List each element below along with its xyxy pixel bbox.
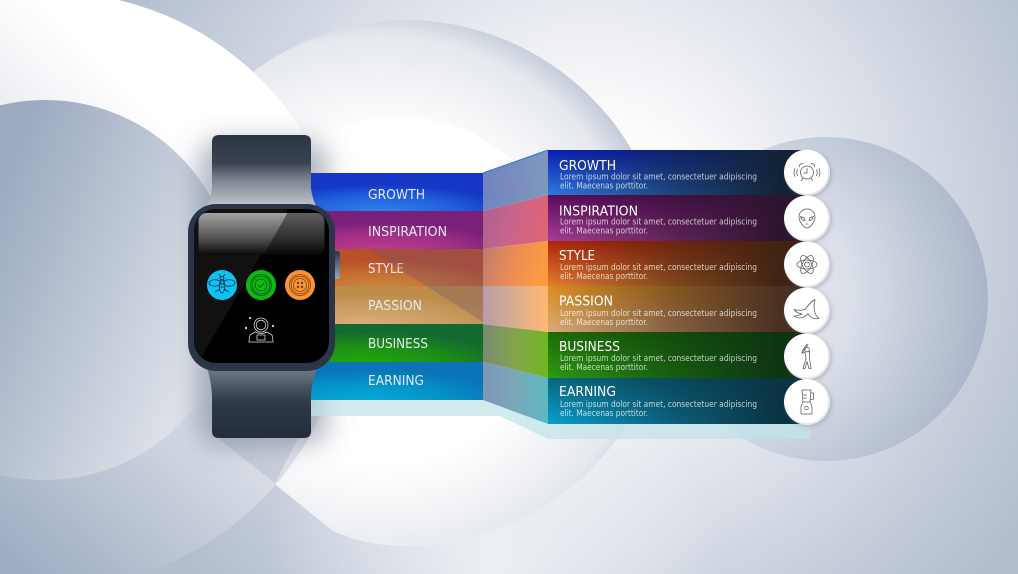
panel: left label bands [311, 173, 483, 400]
row: business: BUSINESS [559, 340, 620, 355]
watch [188, 135, 340, 438]
band: business: BUSINESS [368, 337, 428, 352]
band: business [311, 324, 483, 362]
row: passion: PASSION [559, 294, 613, 310]
app icon: check badge [246, 270, 276, 300]
screen glare [198, 213, 324, 255]
row: earning: EARNING [559, 385, 616, 400]
row: business: Lorem ipsum dolor sit amet, consectetuer adipiscing [560, 354, 757, 364]
app icon: button [285, 270, 315, 300]
band reflection under panels [311, 400, 810, 439]
row: style: STYLE [559, 249, 595, 264]
row: inspiration: INSPIRATION [559, 204, 638, 220]
row: passion: elit. Maecenas porttitor. [560, 318, 648, 328]
band: earning: EARNING [368, 374, 424, 389]
row: earning: Lorem ipsum dolor sit amet, consectetuer adipiscing [560, 400, 757, 410]
band: passion [311, 286, 483, 324]
row: earning: elit. Maecenas porttitor. [560, 409, 648, 419]
panel: angled connector [483, 150, 548, 424]
row: business [548, 332, 806, 378]
band: style: STYLE [368, 262, 404, 277]
row: growth: elit. Maecenas porttitor. [560, 182, 648, 192]
band: style [311, 249, 483, 286]
row: inspiration: Lorem ipsum dolor sit amet, consectetuer adipiscing [560, 218, 757, 228]
watch screen [194, 205, 329, 370]
icon: banana [784, 288, 830, 334]
watch strap bottom [207, 368, 317, 438]
watch strap top [206, 135, 317, 208]
icon: astronaut [245, 317, 274, 342]
app icon: bee [207, 270, 237, 300]
panel: right description rows [548, 150, 806, 424]
diagonal tint across bands [368, 249, 483, 324]
icon: alien [784, 196, 830, 242]
row: inspiration: elit. Maecenas porttitor. [560, 226, 648, 236]
band: inspiration: INSPIRATION [368, 225, 447, 240]
watch soft shadow [198, 140, 328, 445]
row: growth: Lorem ipsum dolor sit amet, consectetuer adipiscing [560, 172, 757, 182]
row: inspiration [548, 195, 806, 241]
icon: atom [784, 242, 830, 288]
icon: blender [784, 379, 830, 425]
watch crown [333, 251, 340, 279]
row: passion: Lorem ipsum dolor sit amet, consectetuer adipiscing [560, 309, 757, 319]
band: growth: GROWTH [368, 188, 425, 203]
band: inspiration [311, 211, 483, 249]
row: style: Lorem ipsum dolor sit amet, consectetuer adipiscing [560, 263, 757, 273]
row: growth: GROWTH [559, 159, 616, 174]
band: passion: PASSION [368, 299, 422, 314]
watch body [188, 204, 335, 371]
row: business: elit. Maecenas porttitor. [560, 363, 648, 373]
row: growth [548, 150, 806, 195]
row: style [548, 241, 806, 286]
icon: alarm clock [784, 150, 830, 196]
band: growth [311, 173, 483, 211]
row: earning [548, 378, 806, 424]
row: passion [548, 286, 806, 332]
band: earning [311, 362, 483, 400]
row: style: elit. Maecenas porttitor. [560, 272, 648, 282]
icon: baseball batter [784, 334, 830, 380]
